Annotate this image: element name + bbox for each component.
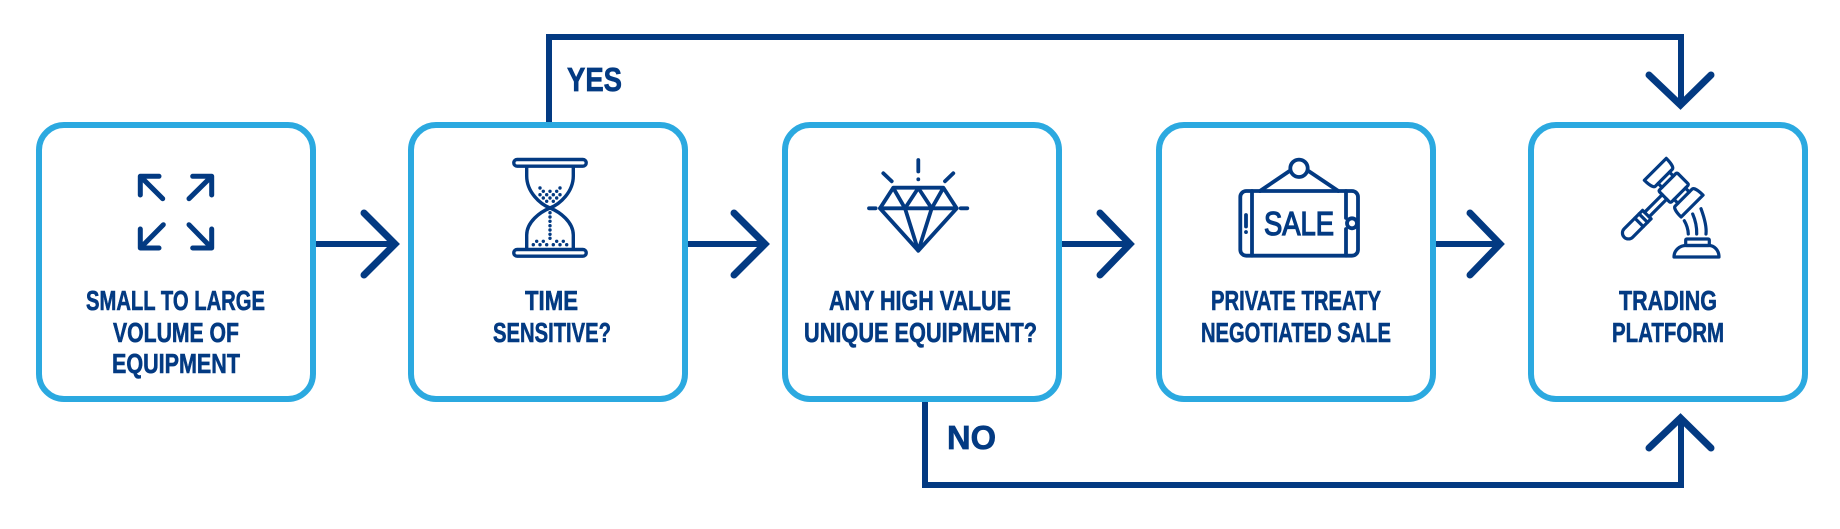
arrow: yes branch to trading platform: [549, 37, 1711, 122]
label text: TIME: [525, 285, 578, 316]
panel: trading platform: [1531, 125, 1805, 399]
label text: PRIVATE TREATY: [1211, 285, 1381, 316]
panel: time sensitive: [411, 125, 685, 399]
arrow: step 2 to 3: [688, 213, 765, 275]
label text: [86, 285, 265, 379]
panel: private treaty: [1159, 125, 1433, 399]
label text: EQUIPMENT: [112, 348, 240, 379]
label text: SENSITIVE?: [493, 317, 611, 348]
label text: [1201, 285, 1391, 348]
label text: SMALL TO LARGE: [86, 285, 265, 316]
label text: VOLUME OF: [113, 317, 239, 348]
icon: expand arrows: [140, 176, 212, 248]
panel: high value equipment: [785, 125, 1059, 399]
arrow: step 3 to 4: [1062, 213, 1130, 275]
icon: gavel: [1606, 158, 1719, 257]
icon: hourglass: [514, 160, 586, 256]
panel: small to large volume: [39, 125, 313, 399]
arrow: step 1 to 2: [316, 213, 395, 275]
arrow: no branch to trading platform: [925, 402, 1711, 485]
label: no: NO: [947, 419, 996, 456]
icon: sale sign: [1240, 160, 1358, 256]
icon: diamond: [869, 160, 967, 251]
arrow: step 4 to 5: [1436, 213, 1500, 275]
label text: [493, 285, 611, 348]
label: yes: YES: [567, 61, 622, 98]
label text: ANY HIGH VALUE: [829, 285, 1011, 316]
icon: sale sign: SALE: [1264, 205, 1334, 242]
label text: [804, 285, 1037, 348]
label text: PLATFORM: [1612, 317, 1724, 348]
label text: TRADING: [1619, 285, 1717, 316]
label text: UNIQUE EQUIPMENT?: [804, 317, 1037, 348]
label text: NEGOTIATED SALE: [1201, 317, 1391, 348]
label text: [1612, 285, 1724, 348]
